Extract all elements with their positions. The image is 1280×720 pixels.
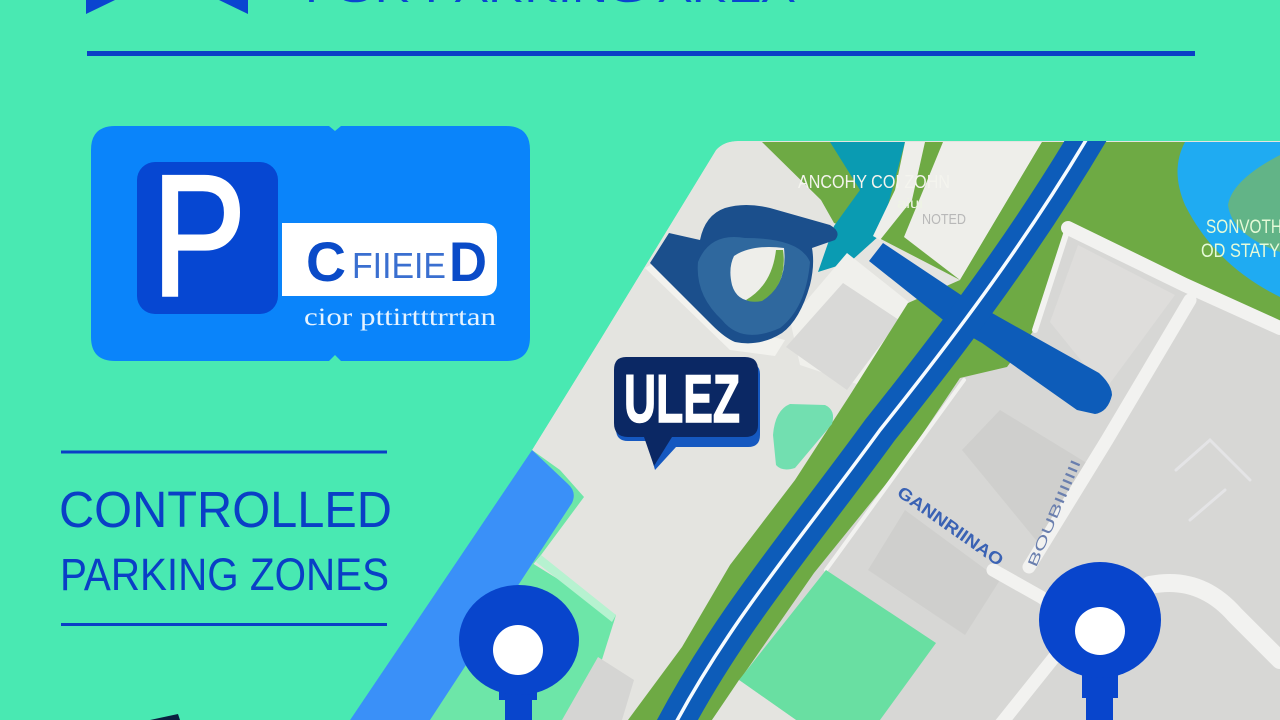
gray block left of road [786,283,899,390]
green right area [1042,142,1280,320]
map labels: BOUBIIIIIII [1024,457,1084,569]
zone label pill: D [449,230,487,293]
map [350,130,1280,720]
header ribbon icon [86,0,248,14]
map labels: aiui [897,195,923,211]
lower right blocks [888,454,1028,617]
heading: controlled parking zones: CONTROLLED [59,481,392,538]
gray block bottom [562,657,634,720]
map labels: ANCOHY COI ZOHN [798,172,950,192]
ULEZ callout: ULEZ [624,361,740,437]
map labels: NOTED [922,211,966,228]
map labels: GANNRIINAO [894,483,1007,570]
ring road interchange [650,205,838,343]
location pin left [459,585,579,720]
ULEZ callout [614,357,760,470]
map labels [798,172,1084,570]
top right lake [1178,142,1280,297]
streets [826,228,1280,720]
location pin right [1039,562,1161,720]
ground below park [712,680,796,720]
cropped arrow bottom left [150,714,180,720]
green road corridor [628,142,1064,720]
top green area [762,142,1042,280]
lower right ground [712,225,1280,720]
white block [904,142,1042,280]
main road [672,130,1092,720]
zone label pill: C [306,230,346,293]
blue strip [350,450,574,720]
upper right blocks [1050,245,1175,390]
heading: controlled parking zones: PARKING ZONES [60,549,389,600]
lower green park [739,570,936,720]
white verge around gray block [790,253,910,385]
parking panel [91,126,530,361]
river [818,142,905,272]
ring road edge [645,260,785,356]
heading: controlled parking zones [59,450,392,626]
cross road [869,243,1112,414]
small pond [773,404,833,469]
zone label pill [282,223,497,296]
header rule [87,51,1195,56]
P sign: P [152,140,246,332]
map base [532,141,1280,720]
panel caption: cior pttirtttrrtan [304,304,497,331]
zone label pill: FIIEIE [352,245,446,286]
light green verge [425,563,616,720]
